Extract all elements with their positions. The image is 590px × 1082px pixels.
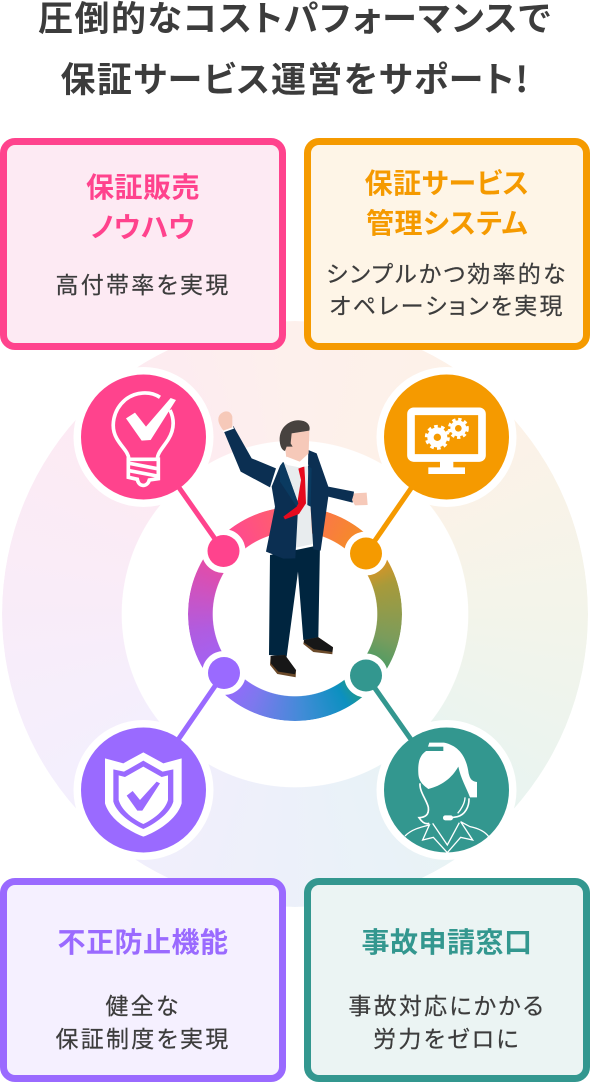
text: fraud prevention: 保証制度を実現 — [56, 1026, 230, 1052]
text: fraud prevention: 健全な — [105, 993, 181, 1019]
panel: accident desk — [304, 878, 590, 1082]
text: accident desk: 事故対応にかかる — [348, 993, 546, 1019]
text: accident desk: 労力をゼロに — [373, 1026, 521, 1052]
icon halos — [74, 367, 516, 860]
icon: monitor with gears — [384, 374, 509, 500]
pale background ring — [2, 321, 588, 907]
heading: management system — [365, 168, 529, 239]
text: management system — [326, 261, 568, 319]
panel: sales know-how — [0, 138, 286, 350]
icon: headset operator — [384, 728, 509, 853]
heading: management system: 保証サービス — [365, 168, 529, 199]
heading: management system: 管理システム — [366, 208, 528, 239]
heading: sales know-how: ノウハウ — [91, 212, 195, 243]
title: 保証サービス運営をサポート! — [60, 52, 530, 103]
gradient centre ring — [188, 507, 402, 721]
heading: accident desk: 事故申請窓口 — [361, 927, 532, 958]
title — [38, 0, 552, 103]
panel: management system — [304, 138, 590, 350]
panel: fraud prevention — [0, 878, 286, 1082]
icon: shield with check — [81, 728, 206, 852]
heading: sales know-how — [86, 172, 200, 243]
businessman figure — [218, 411, 368, 677]
text: sales know-how: 高付帯率を実現 — [56, 272, 230, 298]
heading: fraud prevention: 不正防止機能 — [57, 927, 228, 958]
connector: purple — [144, 657, 240, 790]
text: management system: オペレーションを実現 — [329, 293, 565, 319]
icon: light bulb with check — [81, 374, 206, 500]
connector: pink — [144, 437, 240, 567]
connector: orange — [350, 437, 446, 570]
text: fraud prevention — [56, 993, 230, 1052]
connector: teal — [350, 660, 446, 790]
heading: sales know-how: 保証販売 — [86, 172, 200, 203]
text: accident desk — [348, 993, 546, 1052]
text: management system: シンプルかつ効率的な — [326, 261, 568, 287]
